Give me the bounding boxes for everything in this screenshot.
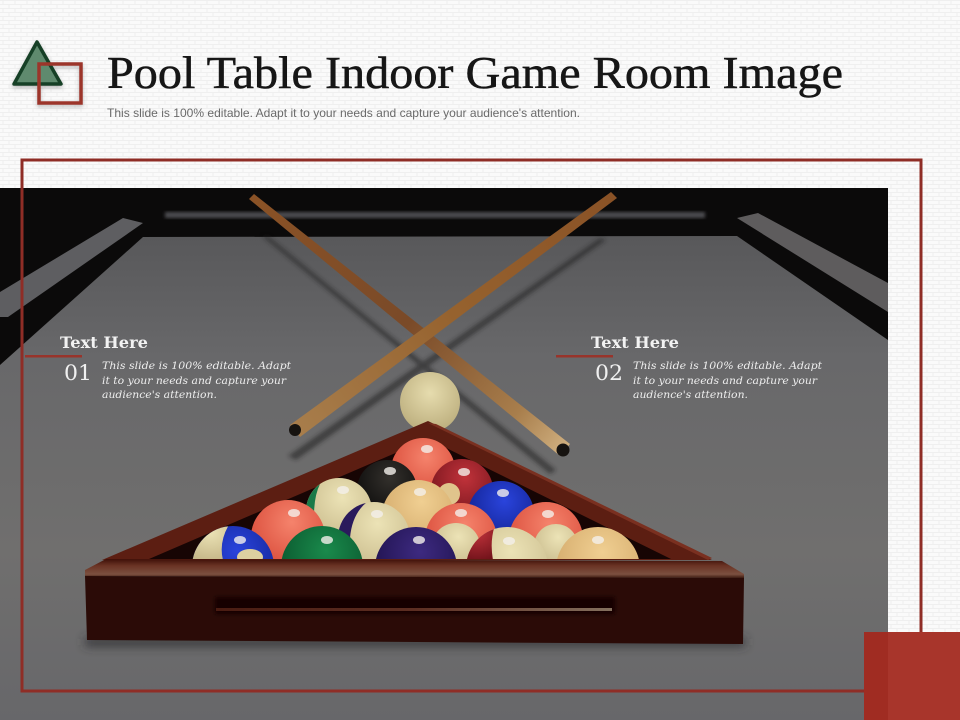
cue: right to left xyxy=(289,192,617,437)
back rows xyxy=(392,438,454,483)
title: Pool Table Indoor Game Room Image xyxy=(107,47,843,98)
callout 02 number: 02 xyxy=(595,361,623,385)
cue shadows xyxy=(262,236,606,474)
cue ball xyxy=(400,372,460,432)
dark table surround xyxy=(0,188,888,365)
photo: pool table with cues and racked balls xyxy=(0,188,888,720)
callout 02 body xyxy=(633,360,823,401)
rack front face xyxy=(85,576,744,644)
racked balls xyxy=(192,438,639,559)
table felt xyxy=(0,236,888,720)
right rail xyxy=(737,213,888,312)
callout 01 heading: Text Here xyxy=(60,333,148,352)
callout 02 line xyxy=(556,355,613,358)
far rail highlight xyxy=(165,212,705,218)
callout 01 body xyxy=(102,360,292,401)
triangle rack xyxy=(102,421,712,560)
third row xyxy=(252,500,324,559)
rack slot xyxy=(215,597,615,614)
ball highlights xyxy=(234,445,604,545)
callout 01 body: audience's attention. xyxy=(102,389,217,401)
front row xyxy=(192,526,274,559)
callout 01 number: 01 xyxy=(64,361,92,385)
callout 02 body: audience's attention. xyxy=(633,389,748,401)
red outline frame xyxy=(22,160,921,691)
subtitle: This slide is 100% editable. Adapt it to your needs and capture your audience's attention. xyxy=(107,106,580,120)
left rail xyxy=(0,218,143,317)
cue: left to right xyxy=(249,194,570,456)
callout 02 heading: Text Here xyxy=(591,333,679,352)
logo icon: triangle and square xyxy=(14,42,81,103)
callout 02 xyxy=(556,333,823,401)
corner square accent xyxy=(864,632,960,720)
callout 02 body: This slide is 100% editable. Adapt xyxy=(633,360,823,372)
rack shadow xyxy=(85,638,745,646)
callout 01 line xyxy=(25,355,82,358)
callout 01 body: it to your needs and capture your xyxy=(102,375,287,387)
callout 01 body: This slide is 100% editable. Adapt xyxy=(102,360,292,372)
callout 01 xyxy=(25,333,292,401)
rack front rim xyxy=(85,559,744,578)
callout 02 body: it to your needs and capture your xyxy=(633,375,818,387)
